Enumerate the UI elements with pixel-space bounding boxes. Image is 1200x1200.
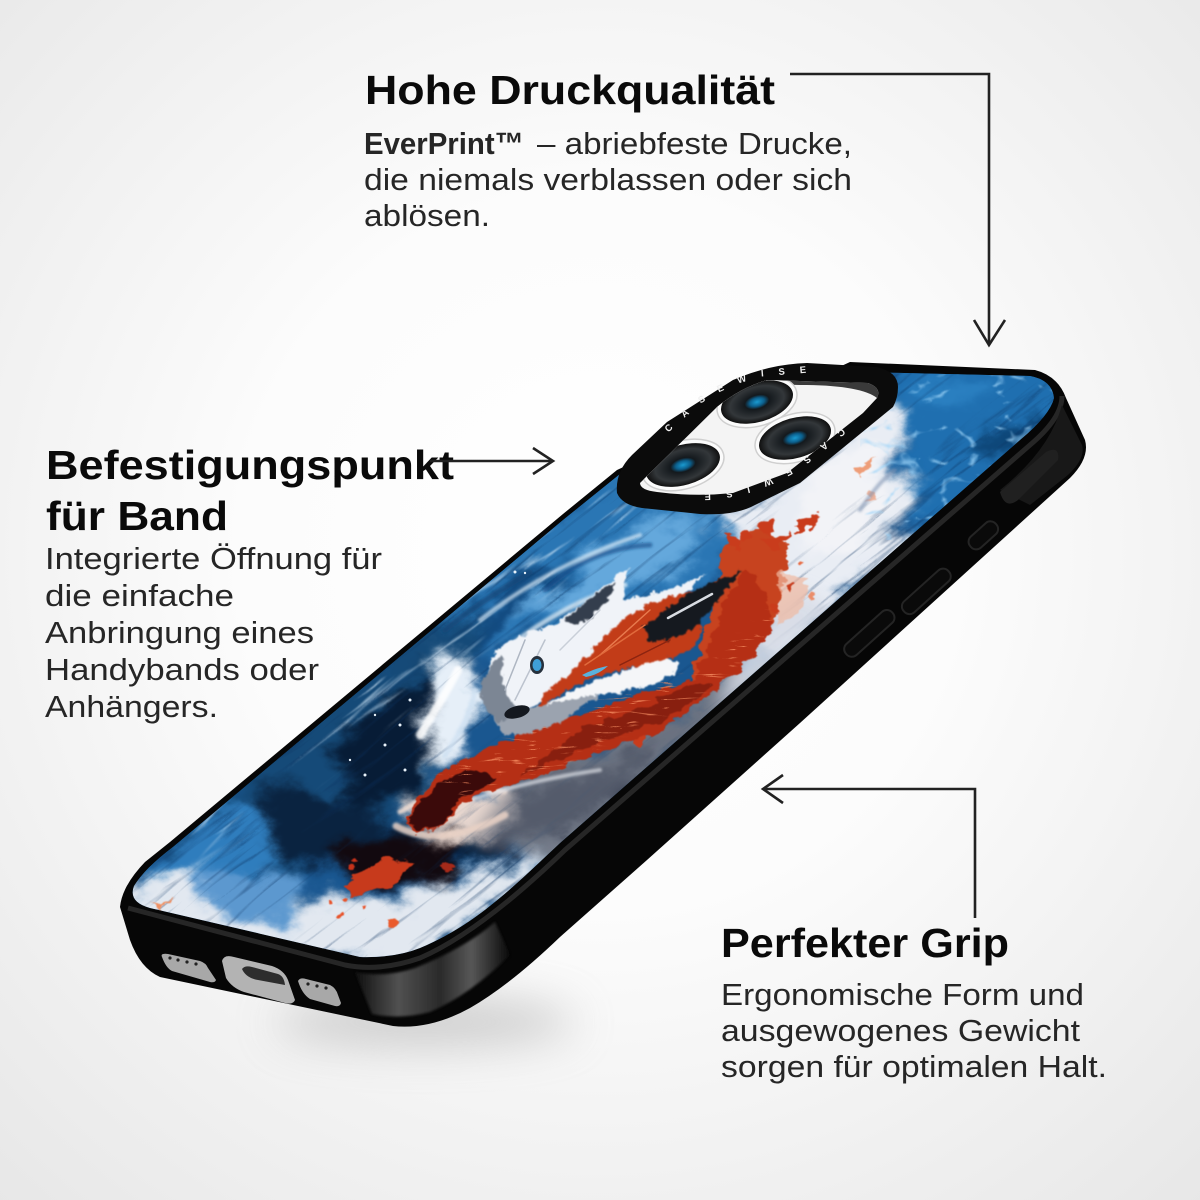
case body xyxy=(120,362,1086,1027)
fox head xyxy=(480,568,742,735)
dark ear xyxy=(643,572,742,642)
red mask xyxy=(540,590,700,707)
pale wash lower right xyxy=(715,590,835,715)
white face and ruff xyxy=(484,568,705,716)
camera glass plate xyxy=(640,380,878,495)
camera ring xyxy=(617,363,898,514)
top right swirl veins xyxy=(905,372,1060,510)
grey muzzle side xyxy=(480,655,518,724)
arrow: to print surface xyxy=(790,74,1005,345)
body text: ausgewogenes Gewicht xyxy=(721,1013,1080,1048)
body text: die einfache xyxy=(45,578,234,613)
bottom left speaker xyxy=(162,954,216,982)
lens left xyxy=(643,438,725,492)
body text: Integrierte Öffnung für xyxy=(45,541,382,576)
ring lettering bottom: CASEWISE xyxy=(704,430,845,500)
corner highlight xyxy=(355,922,510,1017)
body text: EverPrint™ xyxy=(364,126,524,161)
side panel sheen xyxy=(1000,405,1083,505)
fox eye left xyxy=(530,656,544,674)
light marbling xyxy=(132,373,1054,957)
ring inner shade xyxy=(767,380,878,398)
body text: ablösen. xyxy=(364,198,490,233)
body text xyxy=(721,977,1107,1084)
fox tail xyxy=(408,570,772,834)
body text: die niemals verblassen oder sich xyxy=(364,162,852,197)
lens right xyxy=(754,412,836,464)
body text xyxy=(364,126,852,233)
paint streaks xyxy=(396,470,895,836)
heading: Perfekter Grip xyxy=(721,920,1009,966)
ring lettering top: CASEWISE xyxy=(665,366,806,432)
callout: Perfekter Grip xyxy=(721,920,1107,1084)
printed artwork xyxy=(132,372,1054,958)
tail highlights xyxy=(435,610,775,795)
phone drop shadow xyxy=(275,998,575,1046)
side buttons xyxy=(841,518,1001,660)
lenses xyxy=(643,380,836,492)
speckles xyxy=(349,570,526,776)
phone case illustration xyxy=(120,362,1086,1027)
grey wash below tail xyxy=(466,690,722,860)
red splash strokes xyxy=(150,455,880,929)
arrow: to case side xyxy=(763,775,975,918)
heading: für Band xyxy=(46,493,228,539)
fox nose xyxy=(504,705,530,719)
side switch xyxy=(1000,450,1058,504)
bottom right speaker xyxy=(298,978,341,1006)
heading: Befestigungspunkt xyxy=(46,442,454,488)
charging port xyxy=(222,956,295,1004)
body text: Ergonomische Form und xyxy=(721,977,1084,1012)
body text: Handybands oder xyxy=(45,652,319,687)
body text: – abriebfeste Drucke, xyxy=(537,126,852,161)
body text: Anbringung eines xyxy=(45,615,314,650)
arrow: to strap anchor xyxy=(430,448,553,474)
artwork colour fields xyxy=(132,372,1054,958)
callout: Befestigungspunkt xyxy=(45,442,454,724)
heading: Hohe Druckqualität xyxy=(365,67,775,113)
callout: Hohe Druckqualität xyxy=(364,67,852,233)
body text xyxy=(45,541,382,724)
white cheek xyxy=(545,659,679,705)
heading xyxy=(46,442,454,539)
camera module xyxy=(616,363,898,514)
fox fur strokes xyxy=(505,594,712,700)
lens top xyxy=(716,380,798,428)
fox eye right xyxy=(582,666,608,677)
body text: sorgen für optimalen Halt. xyxy=(721,1049,1107,1084)
body text: Anhängers. xyxy=(45,689,218,724)
left ear xyxy=(565,582,615,624)
inner rim highlight xyxy=(128,396,1062,967)
fur under muzzle xyxy=(482,695,600,735)
